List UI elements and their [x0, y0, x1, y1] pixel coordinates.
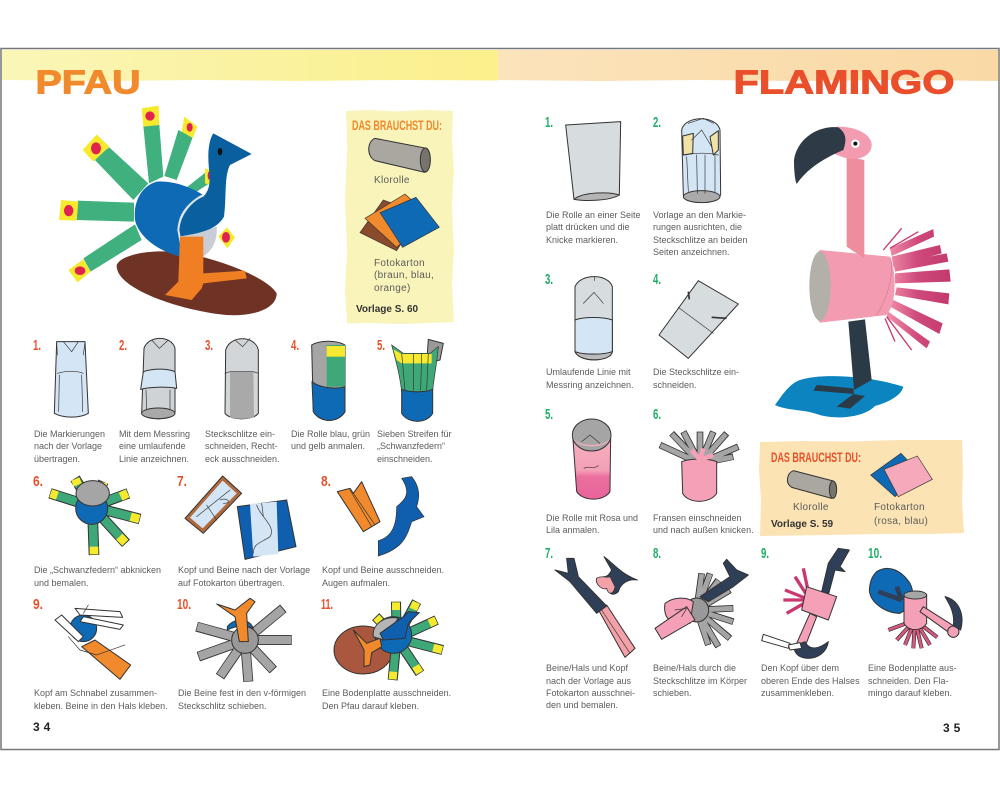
step 10: 10. — [177, 596, 191, 613]
step 9: zusammenkleben. — [761, 688, 834, 698]
step 2: Mit dem Messring — [119, 429, 190, 439]
template reference: Vorlage S. 59 — [771, 519, 834, 530]
icon: coloured card sheets — [360, 194, 439, 251]
step 2: 2. — [653, 114, 661, 131]
step 9 — [33, 596, 168, 711]
step 2: rungen ausrichten, die — [653, 222, 742, 232]
step 4 — [291, 337, 370, 451]
step 7: Beine/Hals und Kopf — [546, 663, 629, 673]
step 2: Steckschlitze an beiden — [653, 235, 748, 245]
material label: Fotokarton: Fotokarton — [874, 502, 925, 513]
step 10: 10. — [868, 545, 882, 562]
materials heading: DAS BRAUCHST DU: — [771, 449, 861, 465]
step 7 — [545, 545, 637, 710]
step 10: schneiden. Den Fla- — [868, 676, 949, 686]
step 7: Kopf und Beine nach der Vorlage — [178, 565, 310, 575]
right page: Flamingo — [498, 50, 998, 735]
step 2: Vorlage an den Markie- — [653, 210, 746, 220]
step 10: Eine Bodenplatte aus- — [868, 663, 957, 673]
step 2: 2. — [119, 337, 127, 354]
header band: yellow — [2, 50, 498, 81]
step 5 — [545, 406, 638, 535]
step 3: Messring anzeichnen. — [546, 380, 634, 390]
step 5: 5. — [545, 406, 553, 423]
step 1 — [33, 337, 105, 464]
step 5: Lila anmalen. — [546, 525, 600, 535]
step 10: mingo darauf kleben. — [868, 688, 952, 698]
step 1: Knicke markieren. — [546, 235, 618, 245]
step 7: 7. — [545, 545, 553, 562]
step 8: schieben. — [653, 688, 692, 698]
page number 34: 34 — [33, 720, 54, 734]
step 3: 3. — [205, 337, 213, 354]
title: Pfau: PFAU — [36, 64, 140, 100]
step 6: Fransen einschneiden — [653, 513, 742, 523]
step 1: Die Rolle an einer Seite — [546, 210, 641, 220]
step 6: 6. — [653, 406, 661, 423]
step 7: Fotokarton ausschnei- — [546, 688, 635, 698]
step 4: Die Steckschlitze ein- — [653, 367, 739, 377]
step 6 — [653, 406, 754, 535]
step 9 — [761, 545, 860, 698]
step 1: platt drücken und die — [546, 222, 630, 232]
step 4: und gelb anmalen. — [291, 441, 365, 451]
material label: Fotokarton: Fotokarton — [374, 258, 425, 269]
step 6: und bemalen. — [34, 578, 89, 588]
step 5: Sieben Streifen für — [377, 429, 452, 439]
page number 35: 35 — [943, 721, 964, 735]
step 3: 3. — [545, 271, 553, 288]
step 5: Die Rolle mit Rosa und — [546, 513, 638, 523]
materials panel: Pfau — [345, 110, 454, 324]
step 10: Die Beine fest in den v-förmigen — [178, 688, 306, 698]
material label: Fotokarton: orange) — [374, 283, 411, 294]
template reference: Vorlage S. 60 — [356, 304, 419, 315]
step 11: 11. — [321, 596, 333, 613]
step 3: eck ausschneiden. — [205, 454, 280, 464]
step 11: Eine Bodenplatte ausschneiden. — [322, 688, 451, 698]
step 3: Steckschlitze ein- — [205, 429, 275, 439]
step 7: 7. — [177, 473, 187, 490]
step 5: „Schwanzfedern“ — [377, 441, 445, 451]
photo: paper flamingo — [775, 127, 951, 417]
step 4: 4. — [653, 271, 661, 288]
step 2 — [119, 337, 190, 464]
step 9: Kopf am Schnabel zusammen- — [34, 688, 157, 698]
step 5: 5. — [377, 337, 385, 354]
photo: paper peacock — [59, 106, 277, 315]
step 9: oberen Ende des Halses — [761, 676, 860, 686]
material label: Fotokarton: (braun, blau, — [374, 270, 434, 281]
icon: toilet roll — [787, 471, 837, 498]
step 11 — [321, 596, 451, 711]
material label: Klorolle: Klorolle — [793, 502, 829, 513]
step 8 — [653, 545, 748, 698]
material label: Klorolle: Klorolle — [374, 175, 410, 186]
step 1: übertragen. — [34, 454, 80, 464]
step 2 — [653, 114, 748, 257]
step 6: 6. — [33, 473, 43, 490]
step 4: Die Rolle blau, grün — [291, 429, 370, 439]
step 1: 1. — [545, 114, 553, 131]
materials panel: Flamingo — [759, 440, 964, 536]
step 4 — [653, 271, 739, 390]
step 5 — [377, 337, 452, 464]
step 1: nach der Vorlage — [34, 441, 102, 451]
header band: peach — [498, 50, 998, 81]
step 9: kleben. Beine in den Hals kleben. — [34, 701, 168, 711]
step 1 — [545, 114, 641, 245]
step 4: schneiden. — [653, 380, 697, 390]
icon: card sheets — [871, 453, 932, 497]
step 3: schneiden, Recht- — [205, 441, 278, 451]
material label: Fotokarton: (rosa, blau) — [874, 516, 928, 527]
step 8: 8. — [653, 545, 661, 562]
step 10 — [177, 596, 306, 711]
step 9: Den Kopf über dem — [761, 663, 839, 673]
step 9: 9. — [33, 596, 43, 613]
step 5: einschneiden. — [377, 454, 433, 464]
left page: Pfau — [2, 50, 498, 734]
step 10 — [868, 545, 962, 698]
step 7: auf Fotokarton übertragen. — [178, 578, 285, 588]
step 6 — [33, 473, 161, 588]
step 8: 8. — [321, 473, 331, 490]
step 8 — [321, 473, 444, 588]
step 8: Steckschlitze im Körper — [653, 676, 747, 686]
step 6: Die „Schwanzfedern“ abknicken — [34, 565, 161, 575]
step 8: Beine/Hals durch die — [653, 663, 736, 673]
materials heading: DAS BRAUCHST DU: — [352, 117, 442, 133]
step 1: 1. — [33, 337, 41, 354]
step 11: Den Pfau darauf kleben. — [322, 701, 419, 711]
step 2: Seiten anzeichnen. — [653, 247, 730, 257]
step 9: 9. — [761, 545, 769, 562]
step 1: Die Markierungen — [34, 429, 105, 439]
step 8: Augen aufmalen. — [322, 578, 390, 588]
title: Flamingo: FLAMINGO — [734, 64, 954, 100]
step 4: 4. — [291, 337, 299, 354]
step 7: den und bemalen. — [546, 700, 618, 710]
step 2: Linie anzeichnen. — [119, 454, 189, 464]
icon: toilet roll — [369, 138, 430, 172]
step 8: Kopf und Beine ausschneiden. — [322, 565, 444, 575]
step 7 — [177, 473, 310, 588]
step 6: und nach außen knicken. — [653, 525, 754, 535]
step 3 — [545, 271, 634, 390]
step 2: eine umlaufende — [119, 441, 186, 451]
step 3: Umlaufende Linie mit — [546, 367, 631, 377]
step 3 — [205, 337, 280, 464]
step 7: nach der Vorlage aus — [546, 676, 632, 686]
step 10: Steckschlitz schieben. — [178, 701, 267, 711]
